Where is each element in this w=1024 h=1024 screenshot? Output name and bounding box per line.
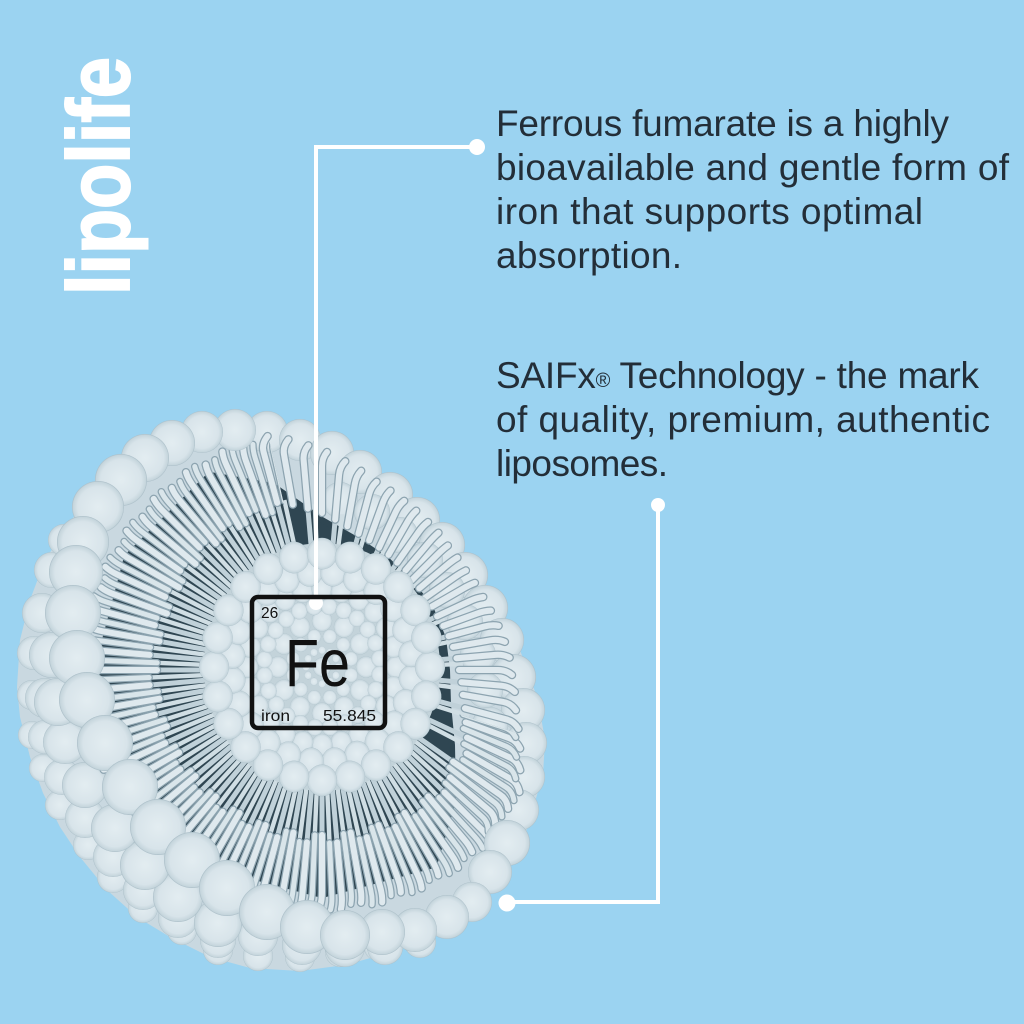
text block: ferrous fumarate: absorption. [496, 235, 682, 276]
text block: SAIFx technology: ® [596, 370, 611, 392]
inner tails [97, 492, 480, 883]
text block: ferrous fumarate: bioavailable and gentle form of [496, 147, 1010, 188]
top and right lipid heads [246, 411, 547, 831]
front ring of lipid heads [45, 409, 530, 960]
connector: top callout to iron element [309, 139, 485, 610]
liposome illustration [15, 409, 547, 972]
periodic table element: iron: 55.845 [323, 708, 376, 725]
back rows of lipid heads [17, 524, 436, 972]
text block: ferrous fumarate [496, 103, 1010, 276]
periodic table element: iron: iron [261, 708, 290, 725]
dark core between tails [97, 475, 453, 895]
inner lipid heads [182, 520, 462, 814]
text block: ferrous fumarate: iron that supports optimal [496, 191, 923, 232]
periodic table element: iron: Fe [285, 626, 350, 701]
text block: SAIFx technology: SAIFx [496, 355, 596, 396]
text block: SAIFx technology [496, 355, 990, 484]
outer tails [27, 436, 523, 961]
text block: ferrous fumarate: Ferrous fumarate is a highly [496, 103, 950, 144]
periodic table element: iron [252, 597, 385, 728]
silhouette backing [17, 418, 545, 971]
connector: SAIFx callout to liposome [498, 498, 665, 912]
extra dense tails on lower left [92, 440, 520, 914]
text block: SAIFx technology: Technology - the mark [610, 355, 980, 396]
periodic table element: iron: 26 [261, 605, 278, 622]
text block: SAIFx technology: liposomes. [496, 443, 668, 484]
logo: lipolife: lipolife [49, 57, 148, 295]
text block: SAIFx technology: of quality, premium, authentic [496, 399, 990, 440]
